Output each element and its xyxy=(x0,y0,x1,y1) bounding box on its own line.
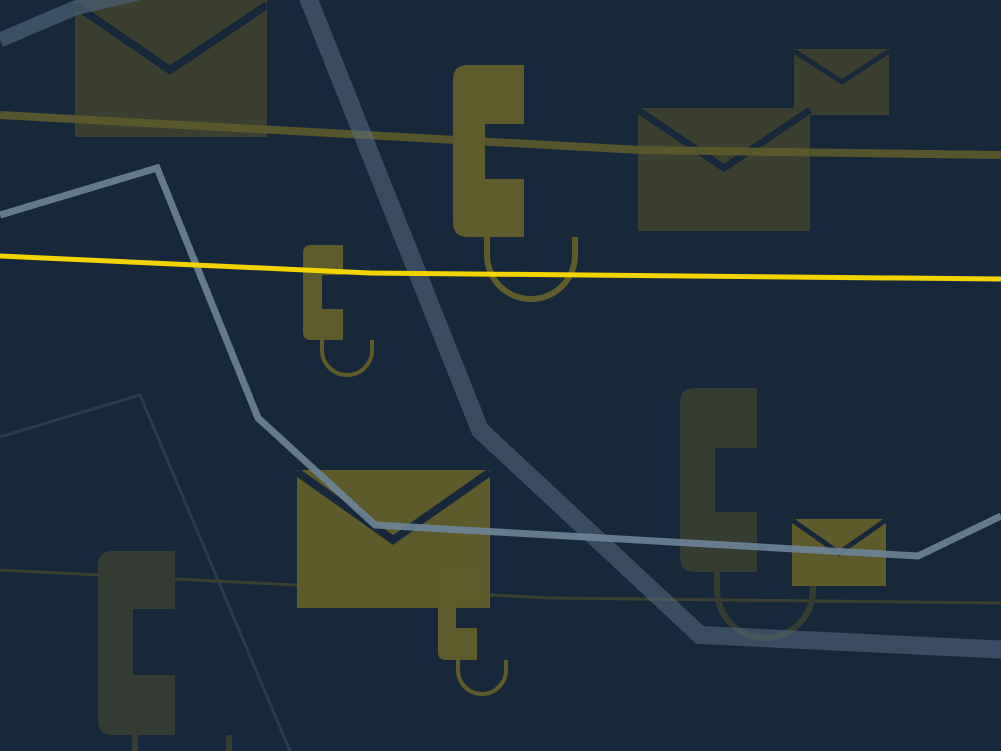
envelope: right small bright xyxy=(792,519,886,586)
bright yellow line xyxy=(0,256,1001,279)
envelope: top left xyxy=(75,0,267,137)
faint line left xyxy=(0,395,290,751)
grey thick line top-left xyxy=(0,0,150,40)
light blue network line xyxy=(0,168,1001,556)
thick translucent network line xyxy=(305,0,1001,650)
faint olive line bottom xyxy=(0,570,1001,603)
envelope: center bright xyxy=(297,470,490,608)
envelope: middle right xyxy=(638,108,810,231)
phone: bottom center bright xyxy=(438,567,506,694)
phone: top center xyxy=(453,65,575,299)
phone: bottom left xyxy=(98,551,229,751)
envelope: top right small xyxy=(794,49,889,115)
phone: small left xyxy=(303,245,372,375)
phone: right dark xyxy=(680,388,813,638)
olive line top xyxy=(0,115,1001,155)
